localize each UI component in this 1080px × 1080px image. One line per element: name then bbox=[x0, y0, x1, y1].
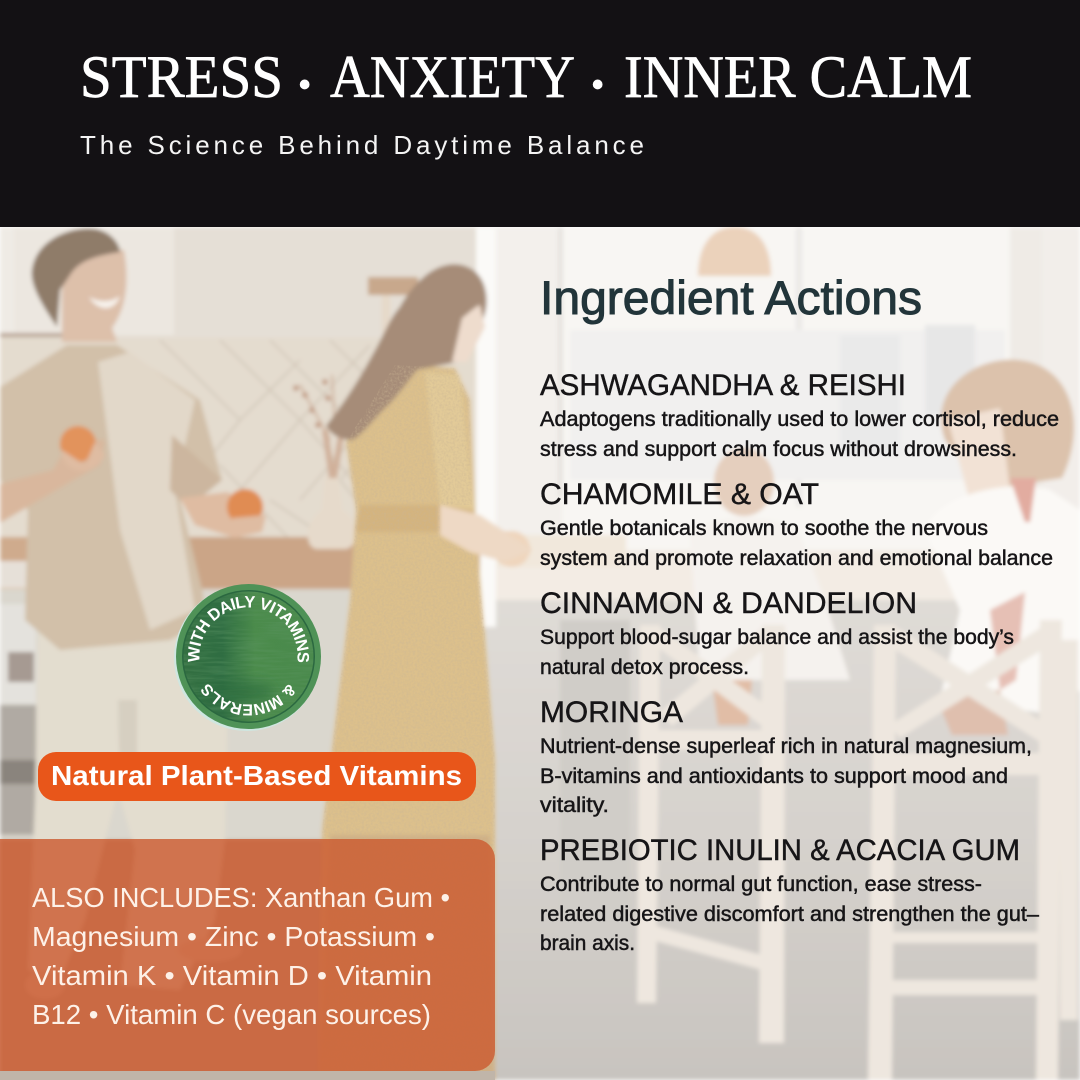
ingredient: moringa: MORINGA bbox=[540, 696, 683, 729]
badge: with daily vitamins and minerals bbox=[174, 584, 321, 731]
ingredient: prebiotic inulin and acacia gum: PREBIOTIC INULIN & ACACIA GUM bbox=[540, 834, 1020, 867]
man torso and shirt bbox=[0, 345, 222, 650]
panel: also includes: B12 • Vitamin C (vegan sources) bbox=[32, 999, 431, 1030]
badge: with daily vitamins and minerals: WITH DAILY VITAMINS bbox=[188, 596, 310, 662]
title: STRESS bbox=[80, 44, 283, 110]
title: • bbox=[591, 64, 604, 106]
children bbox=[714, 448, 774, 516]
vase and dried flowers bbox=[308, 477, 356, 549]
subtitle: The Science Behind Daytime Balance bbox=[80, 130, 644, 160]
ingredient: cinnamon and dandelion: CINNAMON & DANDELION bbox=[540, 587, 917, 620]
left photo: man and woman in kitchen bbox=[0, 227, 532, 1080]
feet bbox=[25, 971, 65, 999]
right photo: bright window and stools bbox=[476, 227, 1080, 1080]
pill label: natural plant-based vitamins: Natural Plant-Based Vitamins bbox=[51, 760, 462, 791]
woman dress bbox=[318, 365, 495, 1080]
lower cabinet and oven bbox=[0, 589, 476, 849]
woman hair and face bbox=[326, 264, 487, 440]
heading: ingredient actions: Ingredient Actions bbox=[540, 272, 922, 325]
ingredient list bbox=[540, 369, 1059, 955]
ingredient: ashwagandha and reishi: stress and support calm focus without drowsiness. bbox=[540, 437, 1017, 461]
upper cabinets bbox=[0, 227, 476, 335]
man legs bbox=[28, 625, 228, 990]
ingredient: moringa: Nutrient-dense superleaf rich in natural magnesium, bbox=[540, 734, 1032, 758]
photo background: kitchen family scene bbox=[0, 227, 1080, 1080]
title: INNER CALM bbox=[624, 44, 972, 110]
stools bbox=[637, 620, 1078, 1080]
man head bbox=[62, 250, 127, 342]
panel: also includes: Vitamin K • Vitamin D • Vitamin bbox=[32, 960, 432, 991]
header band bbox=[0, 0, 1080, 227]
dress pattern texture bbox=[323, 366, 492, 832]
ingredient: prebiotic inulin and acacia gum bbox=[540, 834, 1039, 955]
title: ANXIETY bbox=[330, 44, 575, 110]
panel: also includes bbox=[0, 839, 495, 1071]
panel: also includes: ALSO INCLUDES: Xanthan Gum • bbox=[32, 882, 450, 913]
panel: also includes: Magnesium • Zinc • Potassium • bbox=[32, 921, 435, 952]
ingredient: chamomile and oat: Gentle botanicals known to soothe the nervous bbox=[540, 516, 988, 540]
title bbox=[80, 44, 972, 110]
ingredient: chamomile and oat: CHAMOMILE & OAT bbox=[540, 478, 819, 511]
ingredient: chamomile and oat: system and promote relaxation and emotional balance bbox=[540, 546, 1053, 570]
ingredient: moringa: vitality. bbox=[540, 793, 609, 817]
ingredient: prebiotic inulin and acacia gum: Contribute to normal gut function, ease stress- bbox=[540, 872, 982, 896]
badge: with daily vitamins and minerals: & MINERALS bbox=[201, 684, 295, 716]
ingredient: ashwagandha and reishi: Adaptogens traditionally used to lower cortisol, reduce bbox=[540, 407, 1059, 431]
ingredient: moringa bbox=[540, 696, 1032, 817]
ingredient: cinnamon and dandelion bbox=[540, 587, 1014, 679]
pill label: natural plant-based vitamins bbox=[38, 752, 476, 801]
ingredient: cinnamon and dandelion: Support blood-sugar balance and assist the body’s bbox=[540, 625, 1014, 649]
ingredient: prebiotic inulin and acacia gum: related digestive discomfort and strengthen the gut– bbox=[540, 902, 1039, 926]
ingredient: prebiotic inulin and acacia gum: brain axis. bbox=[540, 931, 635, 955]
counter bbox=[0, 537, 476, 561]
ingredient: chamomile and oat bbox=[540, 478, 1053, 570]
herringbone backsplash bbox=[0, 337, 476, 537]
ingredient: ashwagandha and reishi: ASHWAGANDHA & REISHI bbox=[540, 369, 906, 402]
lower room bbox=[476, 585, 1080, 1080]
ingredient: cinnamon and dandelion: natural detox process. bbox=[540, 655, 749, 679]
oranges bbox=[60, 426, 96, 462]
ingredient: ashwagandha and reishi bbox=[540, 369, 1059, 461]
title: • bbox=[298, 64, 311, 106]
ingredient: moringa: B-vitamins and antioxidants to support mood and bbox=[540, 764, 1008, 788]
